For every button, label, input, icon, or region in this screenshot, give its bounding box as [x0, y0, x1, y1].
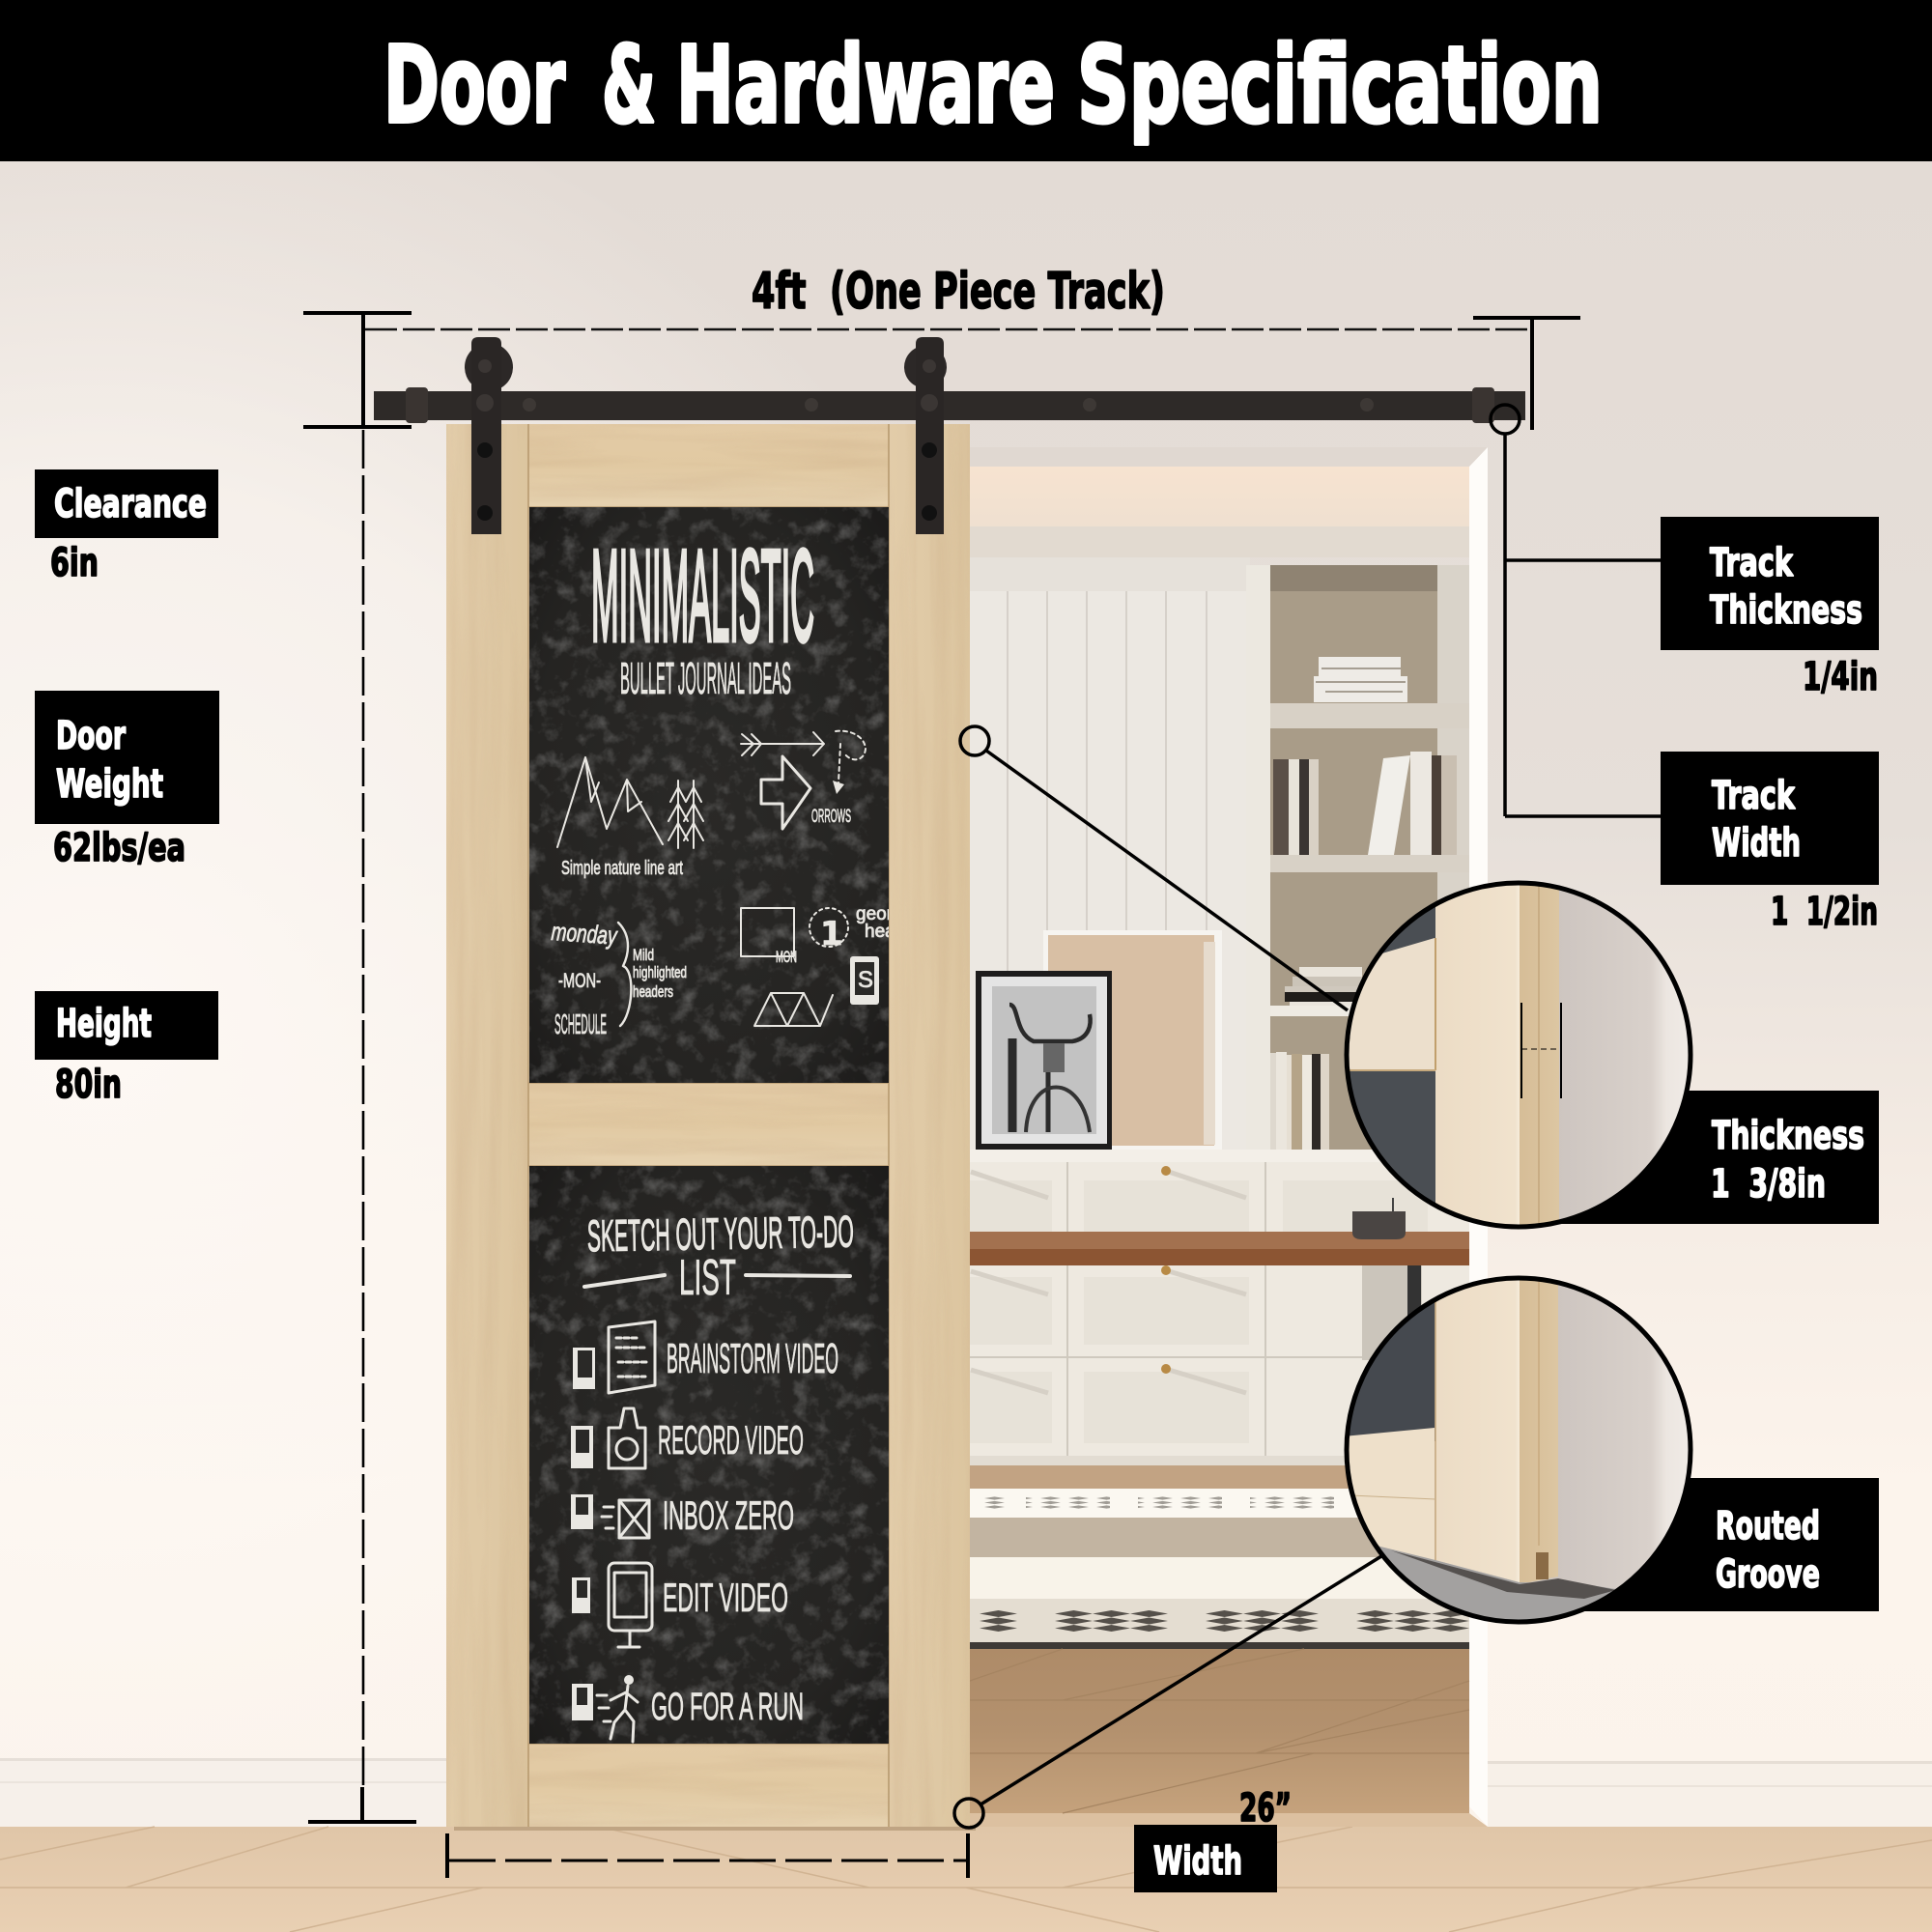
hanger: left [465, 337, 513, 534]
schedule doodle: SCHEDULE [554, 1009, 607, 1040]
callout leader: routed groove [954, 1556, 1381, 1828]
title: Door [384, 23, 565, 147]
callout leader: track [1491, 405, 1661, 816]
label: width: 26” [1239, 1786, 1292, 1831]
title: Specification [1077, 23, 1603, 147]
door seams [528, 424, 889, 1827]
row: edit video: EDIT VIDEO [663, 1575, 788, 1620]
title: & [602, 23, 656, 147]
label: track width: 1 1/2in [1771, 890, 1878, 934]
label: width: Width [1153, 1839, 1242, 1884]
title: Hardware [676, 23, 1055, 147]
chalkboard panel: lower: BRAINSTORM VIDEO [667, 1335, 838, 1382]
row: inbox zero [571, 1492, 794, 1538]
middle rail [528, 1083, 889, 1166]
doodle: arrows [741, 731, 866, 829]
bottom rail [528, 1744, 889, 1827]
door frame soffit and jamb [970, 447, 1488, 1827]
room floor and patterned rug [970, 1456, 1488, 1827]
doodle: mountains and trees [557, 757, 703, 848]
label: track thickness: Track [1710, 541, 1794, 585]
barn door [454, 1825, 976, 1831]
zoom circle: door thickness [1346, 882, 1691, 1228]
label: height: 80in [55, 1063, 122, 1107]
label: door weight: Weight [56, 762, 163, 807]
headers doodle [741, 908, 848, 1026]
label: thickness box: Thickness [1712, 1114, 1864, 1158]
room opening seen through the doorway [970, 447, 1488, 1827]
left stile [446, 424, 528, 1827]
dimension: clearance and height [303, 313, 416, 1822]
label: height [35, 991, 218, 1107]
chalkboard panel: upper: BULLET JOURNAL IDEAS [620, 653, 791, 703]
dimension: track length [365, 263, 1580, 430]
label: routed groove box: Routed [1716, 1504, 1820, 1548]
track bolts [523, 398, 1374, 412]
label: routed groove box [1546, 1478, 1879, 1611]
row: go for a run: GO FOR A RUN [651, 1686, 804, 1728]
list word: LIST [679, 1250, 736, 1306]
label: door weight [35, 691, 219, 870]
label: track width: Width [1712, 821, 1801, 866]
note text: Mild [633, 946, 654, 964]
label: clearance: Clearance [54, 482, 207, 526]
mon label: -MON- [558, 970, 601, 992]
row: brainstorm video [573, 1321, 838, 1393]
cabinets and desk [970, 1150, 1469, 1459]
callout leader: thickness [960, 726, 1348, 1010]
right stile [889, 424, 970, 1827]
top rail [528, 424, 889, 507]
bookcase [1246, 565, 1469, 1164]
chalkboard panel: lower: RECORD VIDEO [658, 1417, 804, 1463]
zoom circle: routed groove [1343, 1277, 1691, 1633]
dimension: door width [447, 1833, 968, 1878]
text: MINIMALISTIC [591, 523, 814, 668]
title bar [0, 0, 1932, 161]
books [1270, 657, 1457, 1150]
label: routed groove box: Groove [1716, 1552, 1820, 1597]
chalkboard panel: lower: SKETCH OUT YOUR TO-DO [586, 1206, 854, 1261]
doodle caption: Simple nature line art [561, 858, 683, 879]
title [384, 23, 1603, 147]
note text line three: headers [633, 982, 673, 1001]
thickness marks [1521, 1003, 1561, 1098]
geometric headers tag: geom [856, 904, 902, 924]
barn door track [374, 387, 1525, 423]
label: height: Height [56, 1002, 152, 1046]
row: inbox zero: INBOX ZERO [663, 1492, 794, 1538]
row: edit video [572, 1563, 788, 1647]
label: track thickness [1661, 517, 1879, 699]
small chalk arrowhead [833, 781, 844, 794]
label: thickness box: 1 3/8in [1711, 1162, 1826, 1207]
monday script: monday [551, 917, 619, 951]
mon tag: MON [776, 948, 797, 966]
note text line two: highlighted [633, 963, 687, 981]
brace [618, 923, 631, 1026]
chalkboard panel: lower [529, 1166, 889, 1744]
ceiling glow and crown moulding [970, 467, 1469, 557]
door shadow [454, 1825, 976, 1831]
label: track width: Track [1712, 774, 1796, 818]
label: width [1134, 1786, 1292, 1892]
wood grain [446, 424, 970, 1827]
label: track thickness: 1/4in [1803, 655, 1878, 699]
list underlines [584, 1275, 850, 1287]
label: thickness box [1546, 1091, 1879, 1224]
track length label: 4ft (One Piece Track) [752, 263, 1165, 321]
row: record video [571, 1408, 804, 1468]
chalkboard panel: upper [529, 507, 905, 1083]
label: track width [1661, 752, 1879, 934]
track stops [406, 387, 1494, 423]
label: clearance [35, 469, 218, 585]
tile S: S [858, 967, 873, 993]
right end marker [1473, 318, 1580, 430]
geometric headers tag line two: head [865, 922, 905, 942]
schedule doodle [551, 917, 654, 1040]
panelled back wall [970, 557, 1250, 1166]
label: clearance: 6in [50, 541, 99, 585]
hanger: right [904, 337, 947, 534]
label: door weight: 62lbs/ea [53, 826, 185, 870]
label: door weight: Door [56, 714, 126, 758]
label: track thickness: Thickness [1710, 588, 1862, 633]
tile S [850, 956, 879, 1005]
row: go for a run [572, 1675, 804, 1742]
framed art [976, 930, 1222, 1150]
floor [0, 1827, 1932, 1932]
chalkboard panel: upper: ORROWS [811, 807, 851, 827]
track length dashed line [365, 328, 1531, 330]
number one: 1 [820, 915, 843, 953]
